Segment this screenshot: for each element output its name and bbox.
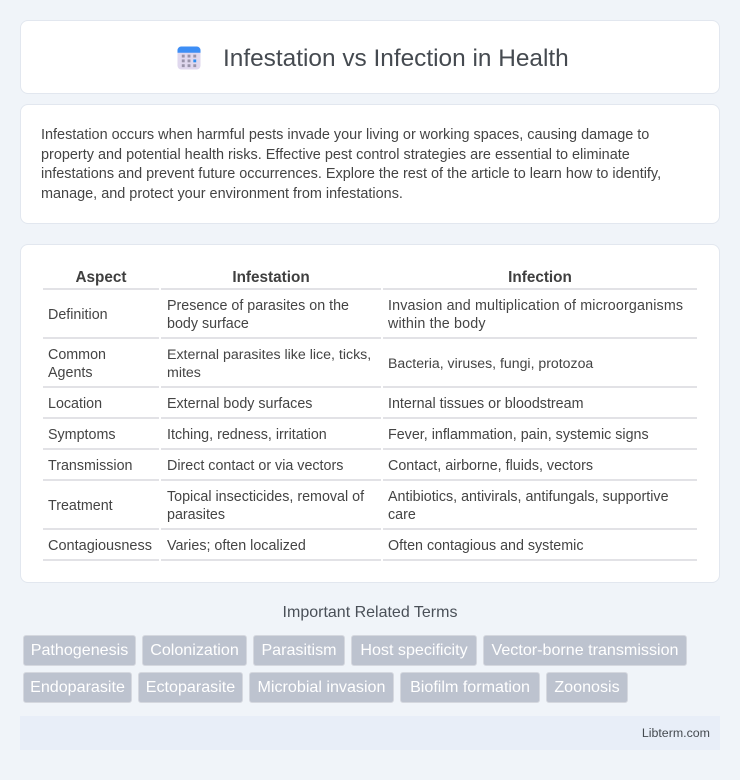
row: location: Location	[48, 396, 102, 412]
row: definition: Presence of parasites on the	[167, 298, 349, 314]
intro text: Infestation occurs when harmful pests invade your living or working spaces, causing damage to	[41, 127, 649, 143]
intro text: manage, and protect your environment from infestations.	[41, 186, 403, 202]
related term tags: Endoparasite	[30, 678, 125, 696]
related term tags: Host specificity	[360, 641, 468, 659]
row: contagiousness: Varies; often localized	[167, 538, 306, 554]
related term tags: Vector-borne transmission	[492, 641, 678, 659]
row: transmission	[48, 458, 593, 474]
row: transmission: Contact, airborne, fluids, vectors	[388, 458, 593, 474]
row: symptoms: Fever, inflammation, pain, systemic signs	[388, 427, 649, 443]
icon: calendar	[177, 46, 201, 70]
related term tags: Microbial invasion	[258, 678, 385, 696]
related terms heading: Important Related Terms	[283, 604, 457, 621]
row: location: Internal tissues or bloodstream	[388, 396, 584, 412]
title: Infestation vs Infection in Health	[223, 45, 569, 72]
row: common agents: Agents	[48, 365, 93, 381]
intro text: property and potential health risks. Effective pest control strategies are essential to eliminate	[41, 146, 630, 162]
row: symptoms	[48, 427, 649, 443]
row: transmission: Transmission	[48, 458, 132, 474]
intro panel	[20, 104, 720, 224]
row: definition: Invasion and multiplication of microorganisms	[388, 298, 683, 314]
row: treatment	[48, 489, 669, 523]
table header: Infection	[508, 269, 572, 286]
related term tags: Pathogenesis	[31, 641, 128, 659]
related term tags: Colonization	[150, 641, 239, 659]
related term tags	[23, 635, 687, 703]
row: common agents: Common	[48, 347, 106, 363]
intro text	[41, 127, 661, 202]
related term tags: Ectoparasite	[146, 678, 235, 696]
table panel	[20, 244, 720, 583]
table header: Infestation	[232, 269, 310, 286]
row: common agents: Bacteria, viruses, fungi, protozoa	[388, 355, 593, 371]
row: symptoms: Symptoms	[48, 427, 116, 443]
row: definition: body surface	[167, 316, 249, 332]
row: definition: Definition	[48, 307, 108, 323]
row: location	[48, 396, 584, 412]
row: treatment: Antibiotics, antivirals, antifungals, supportive	[388, 489, 669, 505]
row: contagiousness: Often contagious and systemic	[388, 538, 584, 554]
row: symptoms: Itching, redness, irritation	[167, 427, 327, 443]
row: transmission: Direct contact or via vectors	[167, 458, 343, 474]
row: treatment: parasites	[167, 507, 225, 523]
row: definition	[48, 298, 683, 332]
footer source: Libterm.com	[642, 726, 710, 740]
row: treatment: care	[388, 507, 416, 523]
row: contagiousness	[48, 538, 584, 554]
row: location: External body surfaces	[167, 396, 312, 412]
table header: Aspect	[75, 269, 126, 286]
related term tags: Parasitism	[261, 641, 337, 659]
row: common agents	[48, 347, 594, 381]
footer bar	[20, 716, 720, 750]
related term tags: Zoonosis	[554, 678, 620, 696]
table header	[75, 269, 572, 286]
row: common agents: mites	[167, 365, 201, 381]
row: treatment: Treatment	[48, 498, 113, 514]
row: common agents: External parasites like lice, ticks,	[167, 347, 371, 363]
intro text: infestations and prevent future occurrences. Explore the rest of the article to learn how to identify,	[41, 166, 661, 182]
row: treatment: Topical insecticides, removal of	[167, 489, 364, 505]
related term tags: Biofilm formation	[410, 678, 530, 696]
row: definition: within the body	[388, 316, 486, 332]
title card	[20, 20, 720, 94]
row: contagiousness: Contagiousness	[48, 538, 152, 554]
